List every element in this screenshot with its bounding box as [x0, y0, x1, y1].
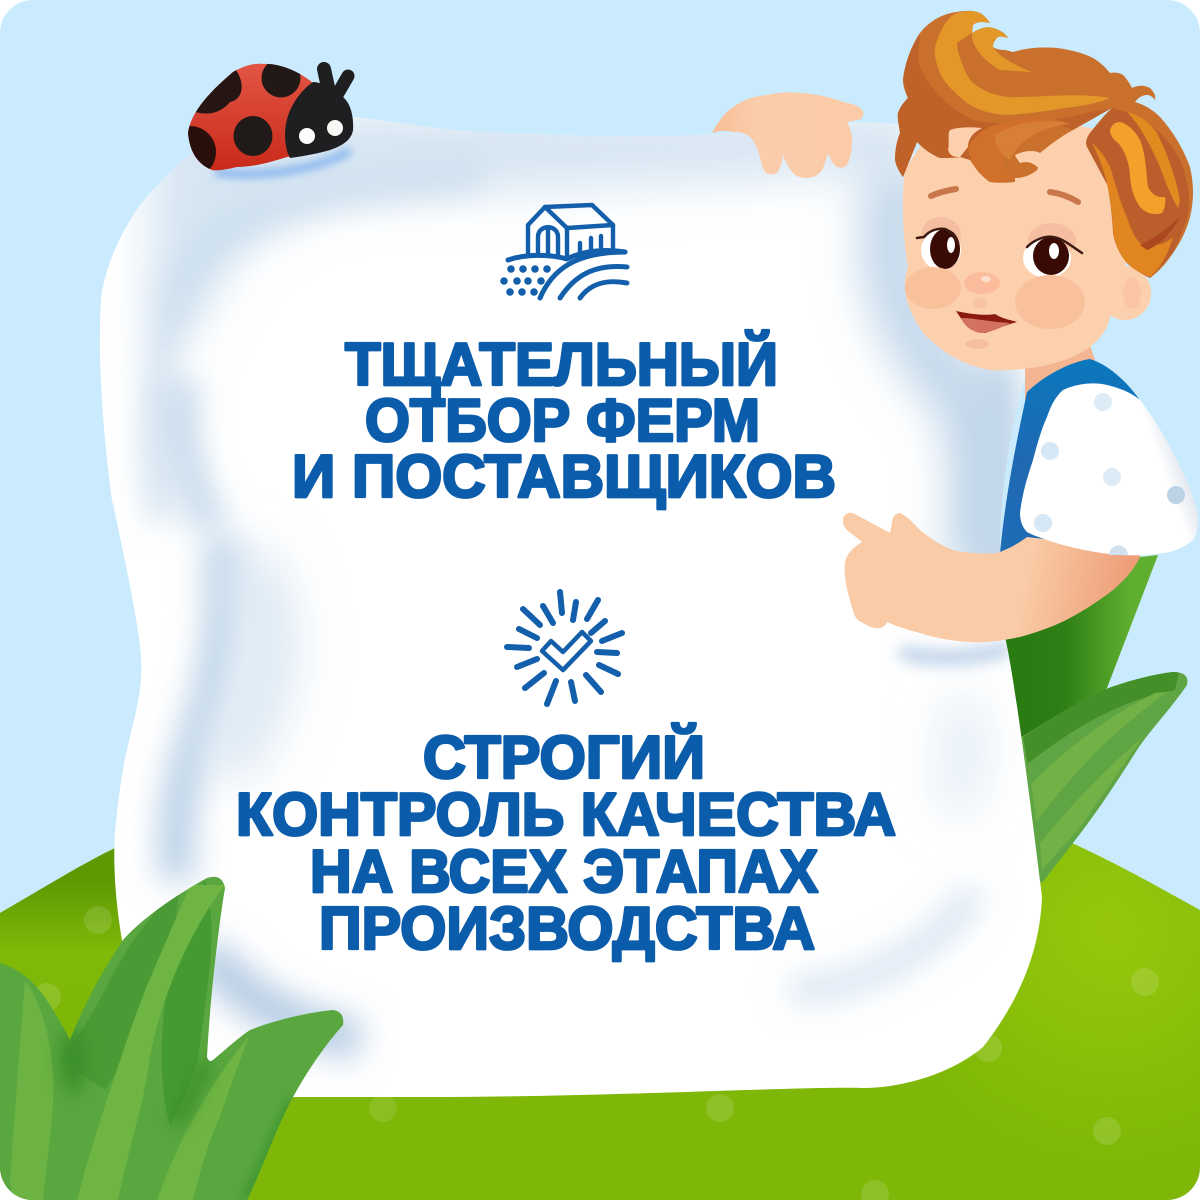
boy [843, 11, 1198, 642]
heading: careful selection of farms: ОТБОР ФЕРМ [365, 387, 760, 454]
heading: careful selection of farms: И ПОСТАВЩИКОВ [292, 443, 836, 510]
heading: careful selection of farms [292, 331, 836, 510]
front right leaf [1022, 672, 1188, 882]
ladybug [188, 62, 355, 183]
nose [964, 272, 1000, 308]
heading: strict quality control: СТРОГИЙ [423, 724, 705, 791]
left grass leaves [0, 877, 343, 1200]
cheeks [905, 267, 1085, 329]
heading: strict quality control: ПРОИЗВОДСТВА [319, 895, 815, 962]
heading: strict quality control: НА ВСЕХ ЭТАПАХ [310, 838, 818, 905]
shirt sleeve [1020, 383, 1198, 555]
hair [895, 11, 1193, 278]
neck [1025, 346, 1095, 400]
right eye [1023, 223, 1082, 278]
green hill [0, 843, 1200, 1200]
heading: strict quality control [236, 724, 896, 962]
left eye [917, 217, 961, 270]
heading: careful selection of farms: ТЩАТЕЛЬНЫЙ [345, 331, 778, 398]
face [902, 126, 1126, 370]
mouth [956, 311, 1017, 349]
boy's hand on top of the panel [712, 92, 864, 178]
arm and pointing hand [843, 513, 1140, 642]
overalls strap [1000, 359, 1141, 553]
ear [1110, 266, 1151, 320]
icon: farm barn on hills [500, 205, 627, 298]
white panel [100, 110, 1042, 1097]
back leaf behind the boy [1006, 555, 1158, 737]
heading: strict quality control: КОНТРОЛЬ КАЧЕСТВА [236, 781, 896, 848]
eyebrows [931, 189, 1078, 202]
icon: check mark with rays [507, 592, 622, 704]
